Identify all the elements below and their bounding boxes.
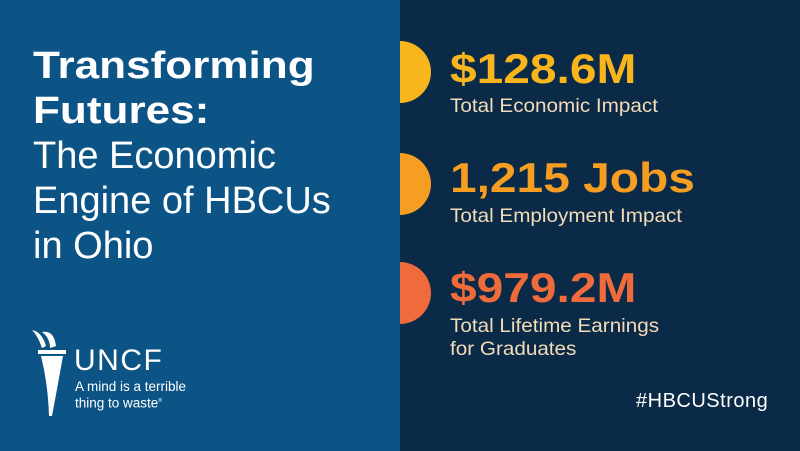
- icon: torch: [32, 330, 66, 416]
- right panel: $128.6M: [450, 45, 636, 92]
- title: Engine of HBCUs: [33, 180, 331, 222]
- hashtag: #HBCUStrong: [636, 390, 768, 412]
- right panel: $979.2M: [450, 264, 636, 311]
- title: Futures:: [33, 90, 209, 132]
- right panel: Total Employment Impact: [450, 205, 682, 227]
- tagline: [75, 379, 186, 410]
- title: [33, 45, 331, 267]
- right panel: for Graduates: [450, 338, 576, 360]
- UNCF logo: [32, 330, 186, 416]
- title: in Ohio: [33, 225, 153, 267]
- stat 3: [400, 262, 659, 360]
- title: The Economic: [33, 135, 276, 177]
- right panel: [400, 0, 800, 451]
- left panel: [0, 0, 400, 451]
- right panel: Total Lifetime Earnings: [450, 315, 659, 337]
- right panel: 1,215 Jobs: [450, 154, 695, 201]
- tagline: A mind is a terrible: [75, 379, 186, 394]
- stat 2: [400, 153, 695, 227]
- stat 1: [400, 41, 658, 117]
- right panel: Total Economic Impact: [450, 95, 658, 117]
- brand text: UNCF: [74, 344, 163, 377]
- title: Transforming: [33, 45, 315, 87]
- tagline: thing to waste®: [75, 396, 162, 410]
